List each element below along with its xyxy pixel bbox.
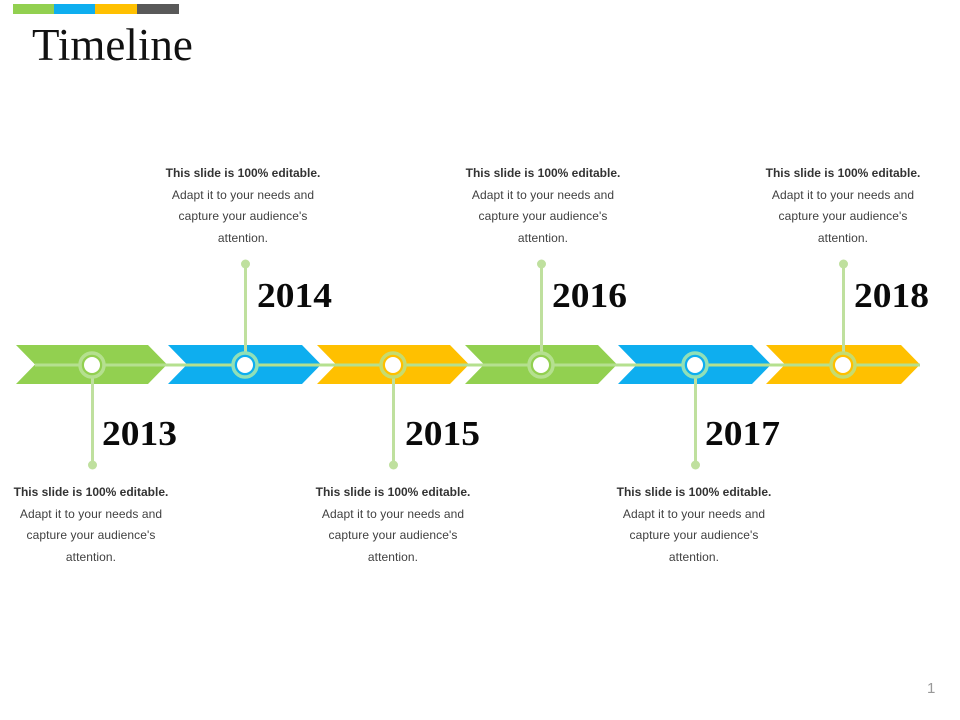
- milestone 2015: [381, 353, 480, 470]
- text block 2017: This slide is 100% editable.: [617, 485, 771, 499]
- text block 2018: [766, 166, 920, 245]
- colour bar: [13, 4, 179, 14]
- text block 2013: capture your audience's: [27, 528, 155, 542]
- text block 2013: attention.: [66, 550, 116, 564]
- milestone 2013: [80, 353, 177, 470]
- text block 2016: attention.: [518, 231, 568, 245]
- milestone 2014: 2014: [257, 276, 332, 315]
- milestone 2013: 2013: [102, 414, 177, 453]
- text block 2017: Adapt it to your needs and: [623, 507, 765, 521]
- text block 2017: capture your audience's: [630, 528, 758, 542]
- text block 2016: Adapt it to your needs and: [472, 188, 614, 202]
- milestone 2016: [529, 260, 627, 377]
- text block 2015: Adapt it to your needs and: [322, 507, 464, 521]
- text block 2014: [166, 166, 320, 245]
- text block 2014: attention.: [218, 231, 268, 245]
- text block 2014: This slide is 100% editable.: [166, 166, 320, 180]
- milestone 2017: [683, 353, 780, 470]
- page number: 1: [927, 680, 935, 697]
- text block 2015: [316, 485, 470, 564]
- text block 2018: This slide is 100% editable.: [766, 166, 920, 180]
- text block 2018: capture your audience's: [779, 209, 907, 223]
- text block 2013: Adapt it to your needs and: [20, 507, 162, 521]
- title: Timeline: [32, 20, 193, 70]
- text block 2015: capture your audience's: [329, 528, 457, 542]
- text block 2016: This slide is 100% editable.: [466, 166, 620, 180]
- milestone 2017: 2017: [705, 414, 780, 453]
- text block 2015: This slide is 100% editable.: [316, 485, 470, 499]
- text block 2017: [617, 485, 771, 564]
- text block 2017: attention.: [669, 550, 719, 564]
- text block 2013: This slide is 100% editable.: [14, 485, 168, 499]
- text block 2013: [14, 485, 168, 564]
- text block 2015: attention.: [368, 550, 418, 564]
- milestone 2014: [233, 260, 332, 377]
- text block 2018: Adapt it to your needs and: [772, 188, 914, 202]
- milestone 2015: 2015: [405, 414, 480, 453]
- text block 2014: Adapt it to your needs and: [172, 188, 314, 202]
- milestone 2018: 2018: [854, 276, 929, 315]
- text block 2014: capture your audience's: [179, 209, 307, 223]
- text block 2016: capture your audience's: [479, 209, 607, 223]
- text block 2016: [466, 166, 620, 245]
- timeline line: [35, 364, 920, 366]
- chevron band: [16, 345, 920, 384]
- text block 2018: attention.: [818, 231, 868, 245]
- milestone 2016: 2016: [552, 276, 627, 315]
- milestone 2018: [831, 260, 929, 377]
